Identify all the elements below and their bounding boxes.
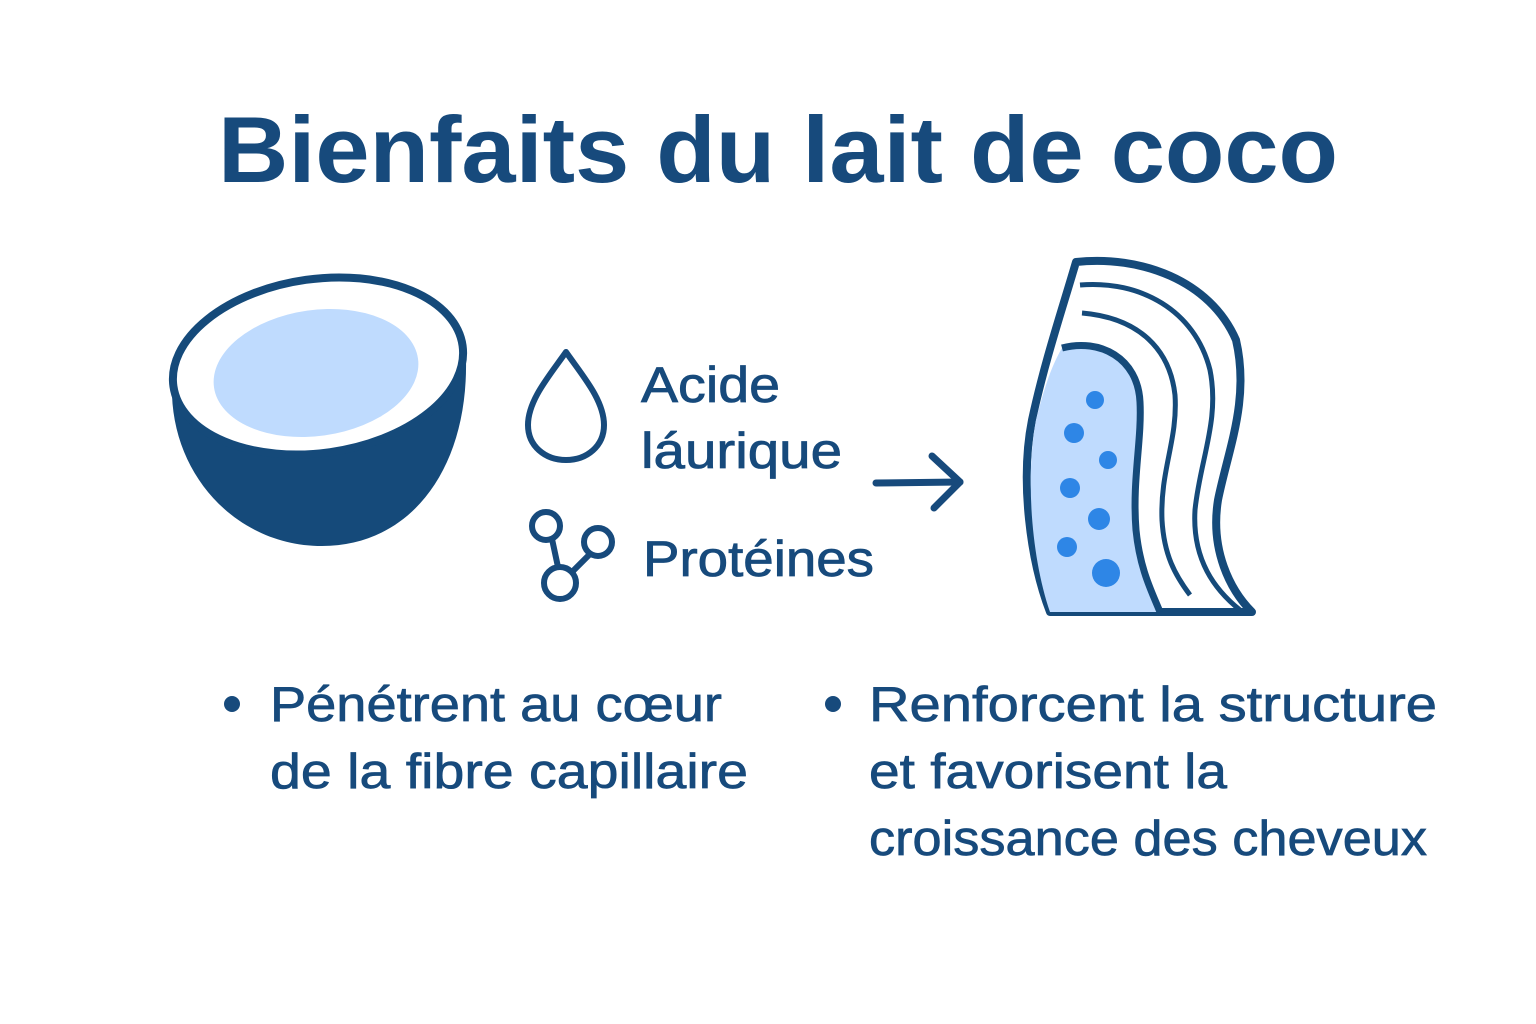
bullet: right: et favorisent la xyxy=(869,745,1228,799)
bullet: left xyxy=(224,678,748,799)
bullet: right xyxy=(825,678,1437,866)
arrow xyxy=(876,456,960,508)
label: proteines: Protéines xyxy=(643,531,874,587)
icon: molecule xyxy=(532,512,612,599)
bullet: right: croissance des cheveux xyxy=(869,812,1427,866)
bullet: left: de la fibre capillaire xyxy=(270,745,748,799)
bullet: left: Pénétrent au cœur xyxy=(270,678,722,732)
title: Bienfaits du lait de coco xyxy=(218,97,1338,202)
label: acide laurique xyxy=(641,357,842,479)
label: acide laurique: Acide xyxy=(641,357,780,413)
label: acide laurique: láurique xyxy=(641,423,842,479)
icon: water drop xyxy=(528,352,604,460)
icon: coconut xyxy=(161,260,475,546)
icon: hair fiber cross-section xyxy=(1027,261,1252,612)
bullet: right: Renforcent la structure xyxy=(869,678,1437,732)
